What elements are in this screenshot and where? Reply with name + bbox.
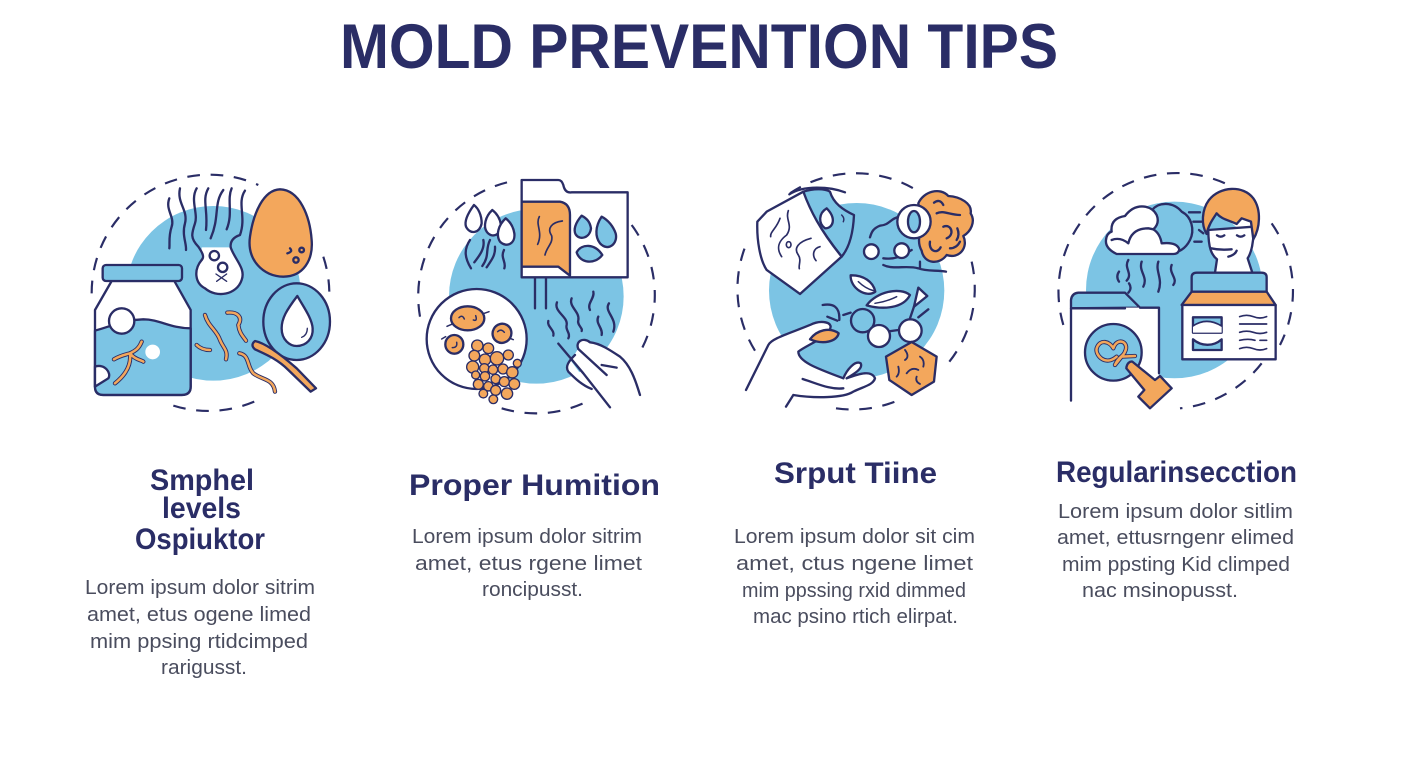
panel text: Smphel levels Ospiuktor [85, 464, 315, 679]
heading: Regularinsecction [1056, 456, 1297, 489]
icon: person [1203, 189, 1259, 273]
panel text: Srput Tiine [734, 457, 975, 628]
panel: icon 1 jar and mold [92, 175, 330, 411]
text block [85, 577, 315, 679]
icon: hand [558, 340, 640, 407]
icon: shield [757, 188, 854, 294]
icon: open hand [746, 322, 875, 407]
panel: icon 4 inspection [1058, 173, 1293, 409]
icon: orange mold blob with lens [864, 191, 973, 272]
icon: plate with orange spores [427, 289, 527, 404]
heading: Ospiuktor [135, 523, 265, 556]
text block [412, 526, 643, 601]
heading: Proper Humition [409, 469, 660, 502]
title: MOLD PREVENTION TIPS [340, 12, 1058, 82]
text block [1057, 501, 1294, 602]
icon: leaves and molecule [823, 275, 937, 395]
text block: amet, etus ogene limed [87, 604, 311, 626]
heading [135, 464, 265, 556]
heading: levels [162, 492, 241, 525]
text block: rarigusst. [161, 657, 247, 679]
icon: wavy humidity lines [548, 292, 614, 338]
text block: Lorem ipsum dolor sitlim [1058, 501, 1293, 523]
icon: potato shaped mold [250, 189, 312, 277]
panel text: Proper Humition [409, 469, 660, 601]
text block: amet, etus rgene limet [415, 553, 643, 575]
panel: icon 2 folder and spores [418, 180, 655, 413]
text block: Lorem ipsum dolor sitrim [85, 577, 315, 599]
text block: mac psino rtich elirpat. [753, 606, 958, 628]
icon: orange worms [197, 313, 316, 392]
icon: wisps and spore flask [168, 188, 245, 294]
panel: icon 3 shield and molecules [737, 173, 975, 410]
heading: Srput Tiine [774, 457, 937, 490]
icon: three drops with wisps [465, 205, 514, 268]
icon: box with report [1182, 273, 1276, 359]
text block: mim ppsting Kid climped [1062, 554, 1290, 576]
icon: rain cloud [1106, 204, 1203, 293]
text block: nac msinopusst. [1082, 580, 1238, 602]
icon: jar [95, 265, 191, 395]
icon: water drop badge [263, 283, 330, 360]
text block: mim ppsing rtidcimped [90, 631, 308, 653]
text block [734, 526, 975, 628]
icon: folder with magnifier [1071, 293, 1172, 409]
text block: amet, ctus ngene limet [736, 553, 974, 575]
panel text: Regularinsecction [1056, 456, 1297, 602]
heading: Smphel [150, 464, 254, 497]
text block: Lorem ipsum dolor sit cim [734, 526, 975, 548]
text block: roncipusst. [482, 579, 583, 601]
text block: Lorem ipsum dolor sitrim [412, 526, 642, 548]
icon: folder [522, 180, 628, 308]
text block: amet, ettusrngenr elimed [1057, 527, 1294, 549]
text block: mim ppssing rxid dimmed [742, 580, 966, 602]
